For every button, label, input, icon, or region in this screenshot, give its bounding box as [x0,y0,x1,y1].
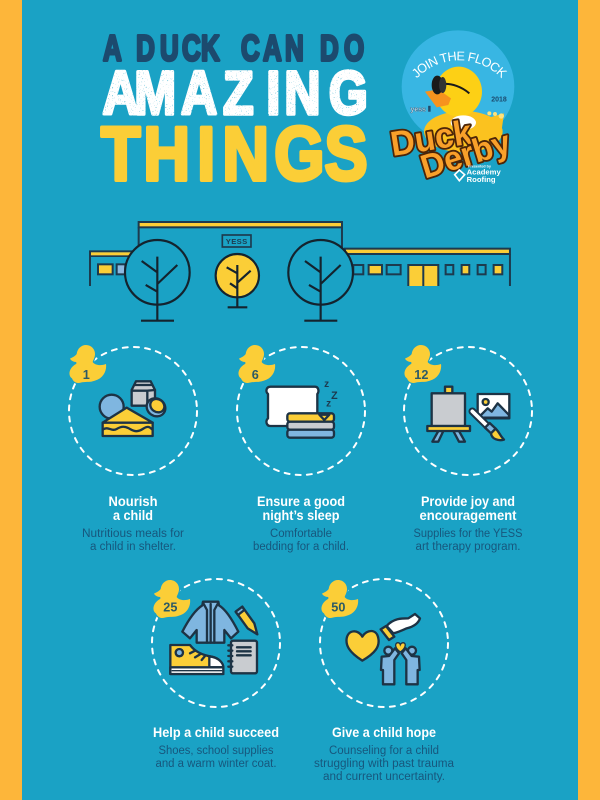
text: succeed: Shoes, school supplies [158,745,274,757]
text: sleep: Ensure a good [257,494,345,509]
panel: give a child hope [314,579,455,783]
tree centre [216,254,259,307]
year: 2018 [491,96,507,103]
text: nourish: Nourish [108,494,158,509]
icon: school gear [170,602,257,674]
shoe [170,645,223,674]
icon: bedding: z [326,398,331,409]
duck badge 25 [153,580,190,618]
text: hope [314,725,455,783]
text: succeed: Help a child succeed [153,725,279,740]
tree right [288,240,353,321]
text: joy: art therapy program. [416,541,520,553]
text: nourish: Nutritious meals for [82,528,184,540]
panel: nourish a child [69,345,197,553]
arched slogan: JOIN THE FLOCK [412,52,508,78]
tree left [125,240,190,321]
YESS sign: YESS [226,237,248,246]
panel: good night's sleep [237,345,365,553]
text: succeed: and a warm winter coat. [156,758,276,770]
title [101,28,368,196]
hand [387,614,420,633]
title line 3: THINGS [101,111,368,196]
title line 2: AMAZING [103,59,368,127]
text: hope: Counseling for a child [329,745,439,757]
text: hope: Give a child hope [332,725,436,740]
duck badge 1 [69,345,106,383]
rubber duck [424,67,504,152]
text: sleep: night’s sleep [262,508,340,523]
people [384,647,392,655]
duck badge 50 [321,580,358,618]
text: nourish: a child [113,508,153,523]
text: nourish: a child in shelter. [90,541,176,553]
text: joy: Supplies for the YESS [414,528,523,540]
notebook [231,641,257,673]
duck badge 6: 6 [252,368,259,382]
sponsor: Presented by [468,164,492,168]
sponsor: Roofing [467,175,496,184]
duck badge 50: 50 [331,600,345,614]
text: sleep: Comfortable [270,528,332,540]
icon: bedding: z [324,379,329,390]
icon: heart and hand [346,614,420,684]
text: hope: struggling with past trauma [314,758,455,770]
duck badge 1: 1 [83,368,90,382]
icon: art supplies [427,387,509,442]
icon: bedding: Z [331,390,338,402]
dashed ring 5 [320,579,448,707]
right side bar [578,0,600,800]
building outline [90,222,510,286]
panel: joy and encouragement [404,345,532,553]
pencil [236,607,257,634]
sponsor: Academy [467,168,501,177]
jacket [182,602,238,643]
text: sleep [253,494,349,553]
left side bar [0,0,22,800]
dashed ring 2 [237,347,365,475]
dashed ring 1 [69,347,197,475]
YESS sign [222,235,251,247]
text: sleep: bedding for a child. [253,541,349,553]
heart [346,631,379,661]
text: nourish [82,494,184,553]
yess mark: yess ⅱ [410,106,431,114]
sponsor [455,164,501,184]
Duck Derby logo [388,30,515,186]
duck badge 6 [238,345,275,383]
duck badge 12: 12 [414,368,428,382]
text: succeed [153,725,279,770]
Duck Derby wordmark: Derby [417,124,515,186]
text: hope: and current uncertainty. [323,771,445,783]
Duck Derby wordmark: Duck [388,113,475,164]
duck badge 12 [404,345,441,383]
Duck Derby wordmark [388,113,515,186]
dashed ring 4 [152,579,280,707]
title line 1: A DUCK CAN DO [103,28,364,69]
text: joy: Provide joy and [421,494,515,509]
duck badge 25: 25 [163,600,177,614]
text: joy [414,494,523,553]
panel: help a child succeed [152,579,280,770]
icon: bedding [266,379,338,438]
text: joy: encouragement [420,508,517,523]
icon: food [100,381,169,436]
dashed ring 3 [404,347,532,475]
building illustration [90,222,510,321]
